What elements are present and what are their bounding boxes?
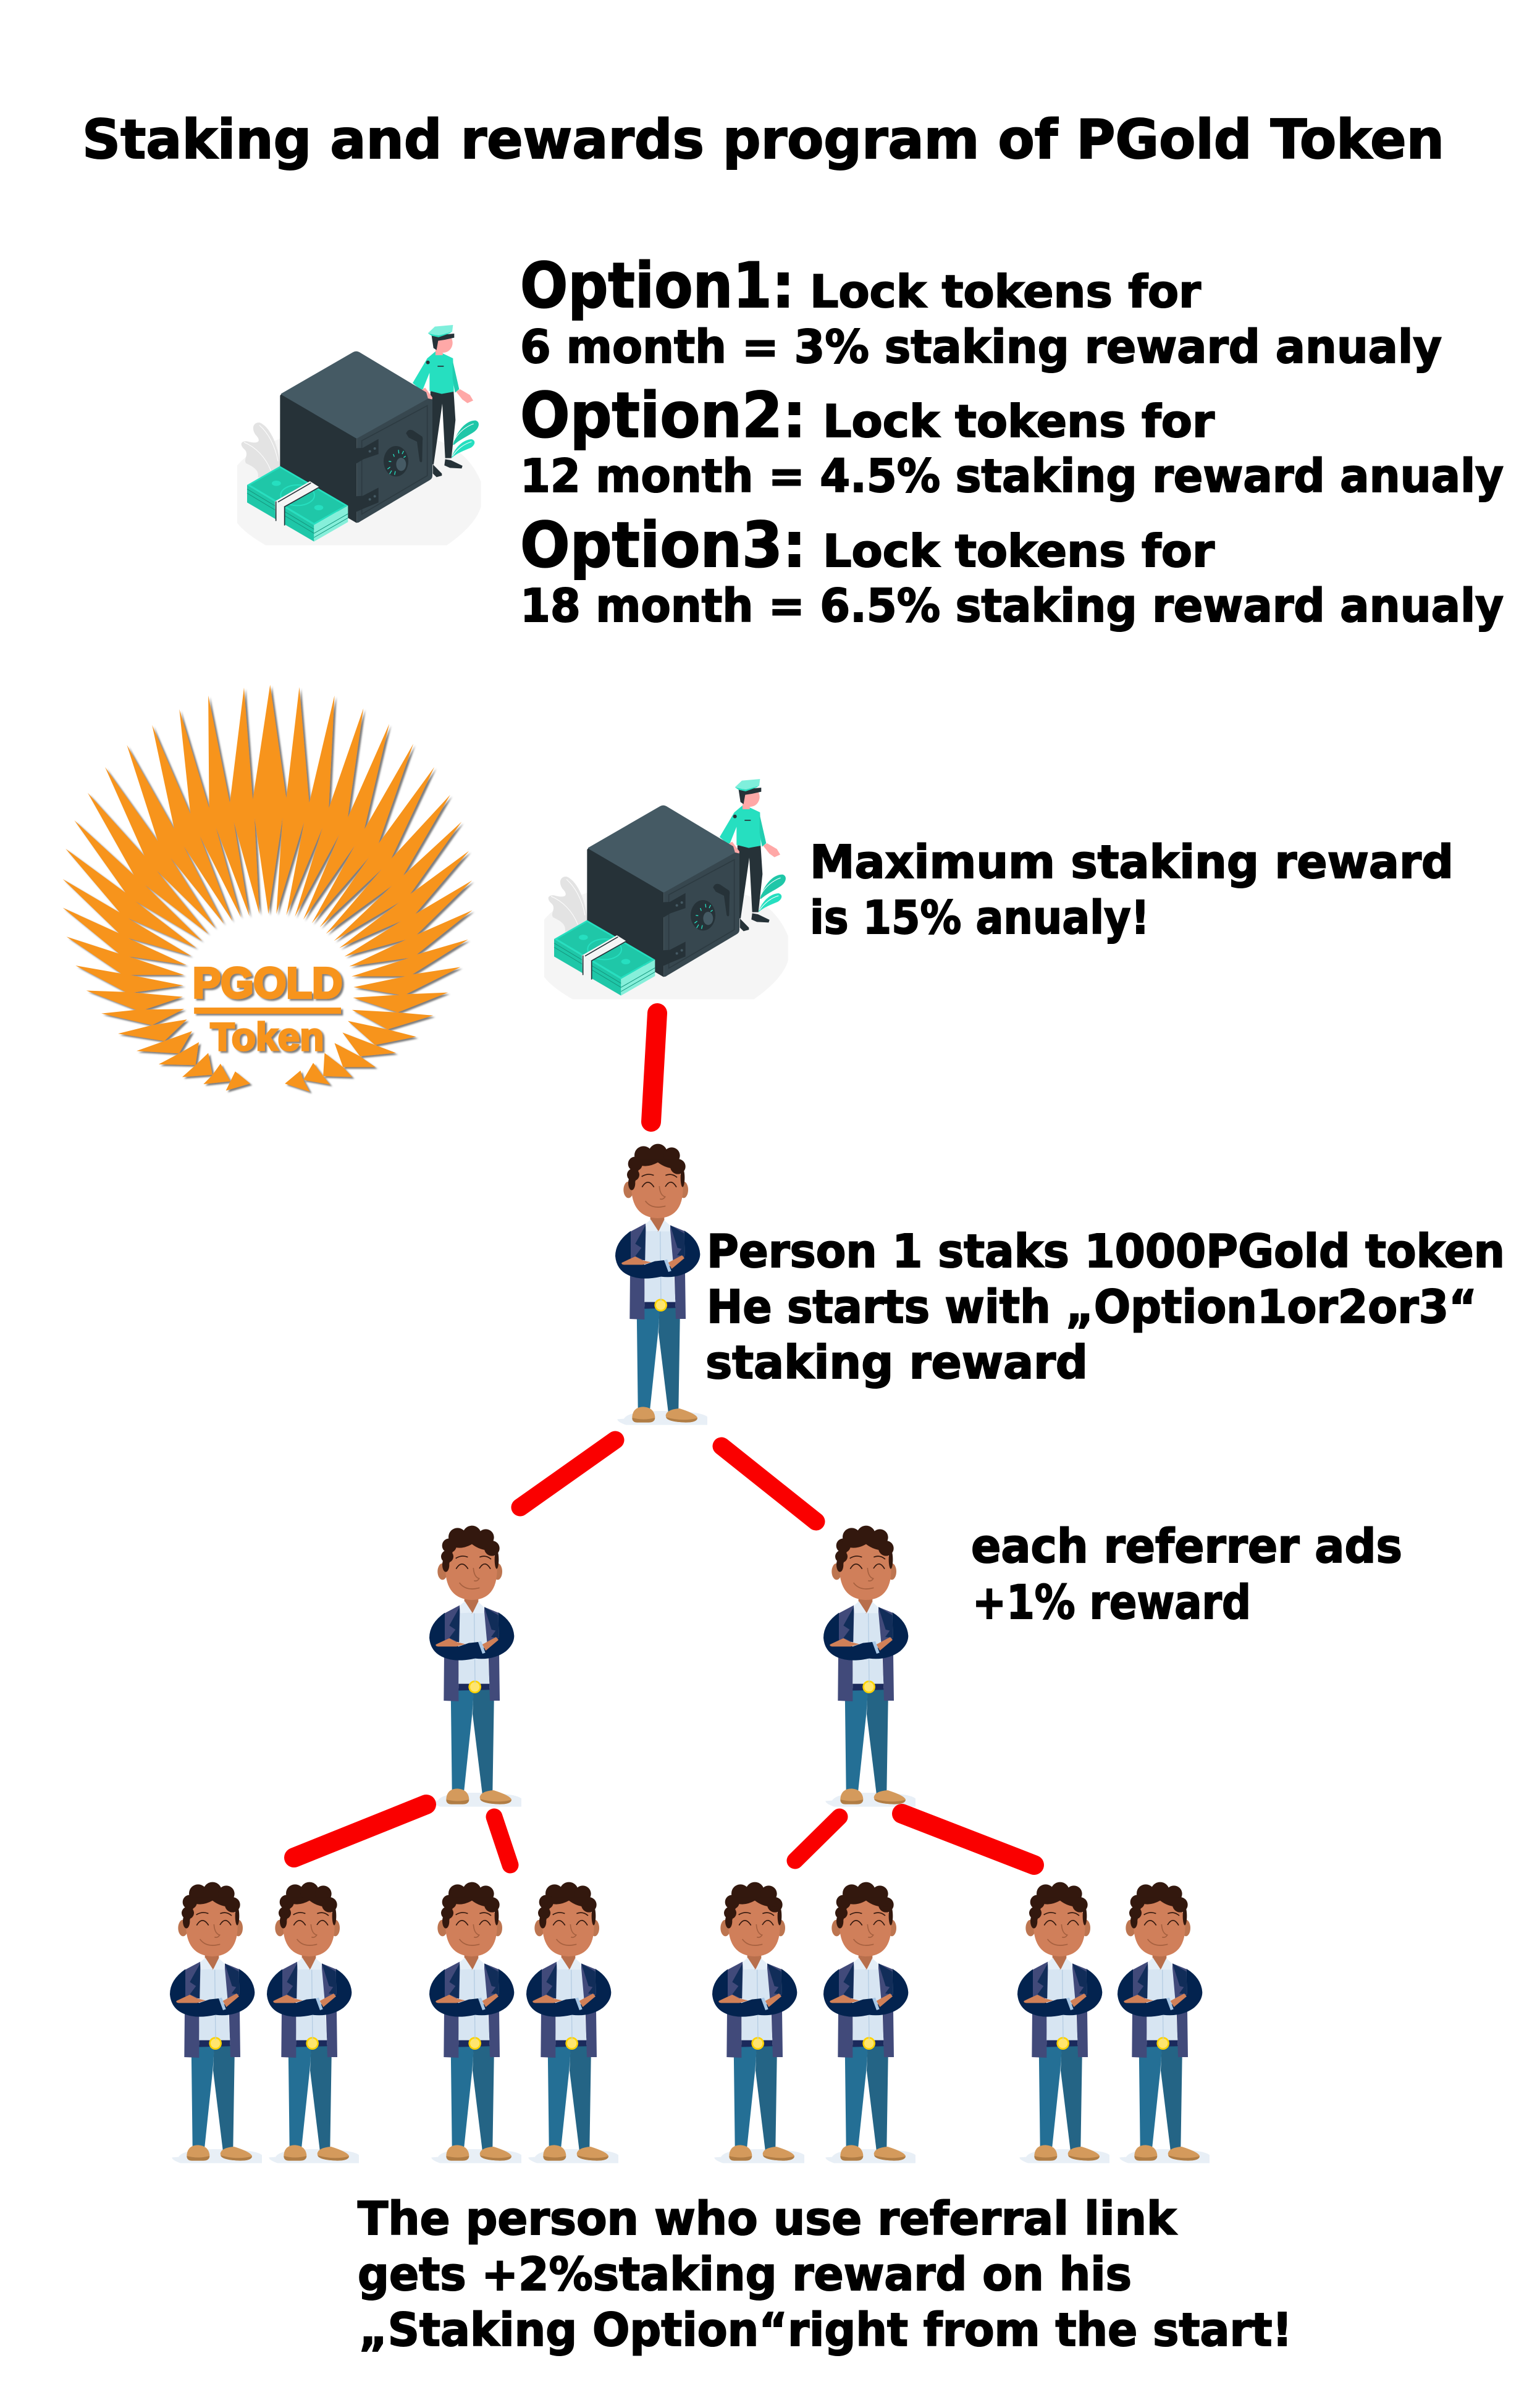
option 1 reward: 6 month = 3% staking reward anualy — [520, 321, 1442, 374]
connector: left referrer to bottom row 1 — [294, 1804, 426, 1858]
icon: safe with guard (options) — [237, 325, 481, 545]
connector: person 1 to right referrer — [722, 1446, 816, 1522]
option 2 heading: Option2: — [520, 379, 806, 452]
option 2 lock text: Lock tokens for — [823, 395, 1214, 447]
text: referral link bonus: The person who use referral link — [358, 2192, 1177, 2246]
person: referrer right — [823, 1526, 915, 1807]
option 1 heading: Option1: — [520, 249, 794, 322]
text: person 1 description: He starts with „Option1or2or3“ — [707, 1281, 1477, 1334]
connector: right referrer to bottom row 3 — [795, 1817, 840, 1861]
text: each referrer adds: each referrer ads — [971, 1518, 1402, 1573]
title: Staking and rewards program of PGold Token — [82, 108, 1444, 171]
connector: safe to person 1 — [651, 1013, 657, 1122]
icon: safe with guard (maximum reward) — [544, 779, 788, 1000]
text: referral link bonus: „Staking Option“right from the start! — [359, 2304, 1292, 2357]
text: person 1 description: staking reward — [705, 1336, 1088, 1389]
logo subtitle: Token — [210, 1016, 324, 1059]
connector: left referrer to bottom row 2 — [494, 1817, 510, 1865]
person: referrer left — [429, 1526, 521, 1807]
option 3 lock text: Lock tokens for — [823, 525, 1214, 577]
connector: right referrer to bottom row 4 — [902, 1814, 1034, 1865]
text: maximum staking reward — [810, 836, 1454, 945]
logo wordmark: PGOLD — [193, 959, 342, 1007]
option 3 reward: 18 month = 6.5% staking reward anualy — [520, 579, 1504, 633]
text: referral link bonus: gets +2%staking reward on his — [358, 2248, 1132, 2301]
connector: person 1 to left referrer — [520, 1440, 615, 1507]
text block: staking options — [520, 249, 1504, 633]
option 2 reward: 12 month = 4.5% staking reward anualy — [520, 450, 1504, 503]
text: maximum staking reward: is 15% anualy! — [810, 891, 1150, 945]
text: person 1 description — [705, 1225, 1505, 1389]
people: bottom row — [170, 1882, 1210, 2163]
option 3 heading: Option3: — [520, 508, 806, 581]
option 1 lock text: Lock tokens for — [810, 266, 1201, 318]
text: each referrer adds — [971, 1518, 1402, 1630]
text: each referrer adds: +1% reward — [972, 1575, 1251, 1630]
text: person 1 description: Person 1 staks 1000PGold token — [707, 1225, 1505, 1278]
person 1 — [615, 1144, 707, 1425]
text: maximum staking reward: Maximum staking reward — [810, 836, 1454, 889]
text: referral link bonus — [358, 2192, 1292, 2357]
logo: PGold Token sunburst — [63, 684, 473, 1092]
